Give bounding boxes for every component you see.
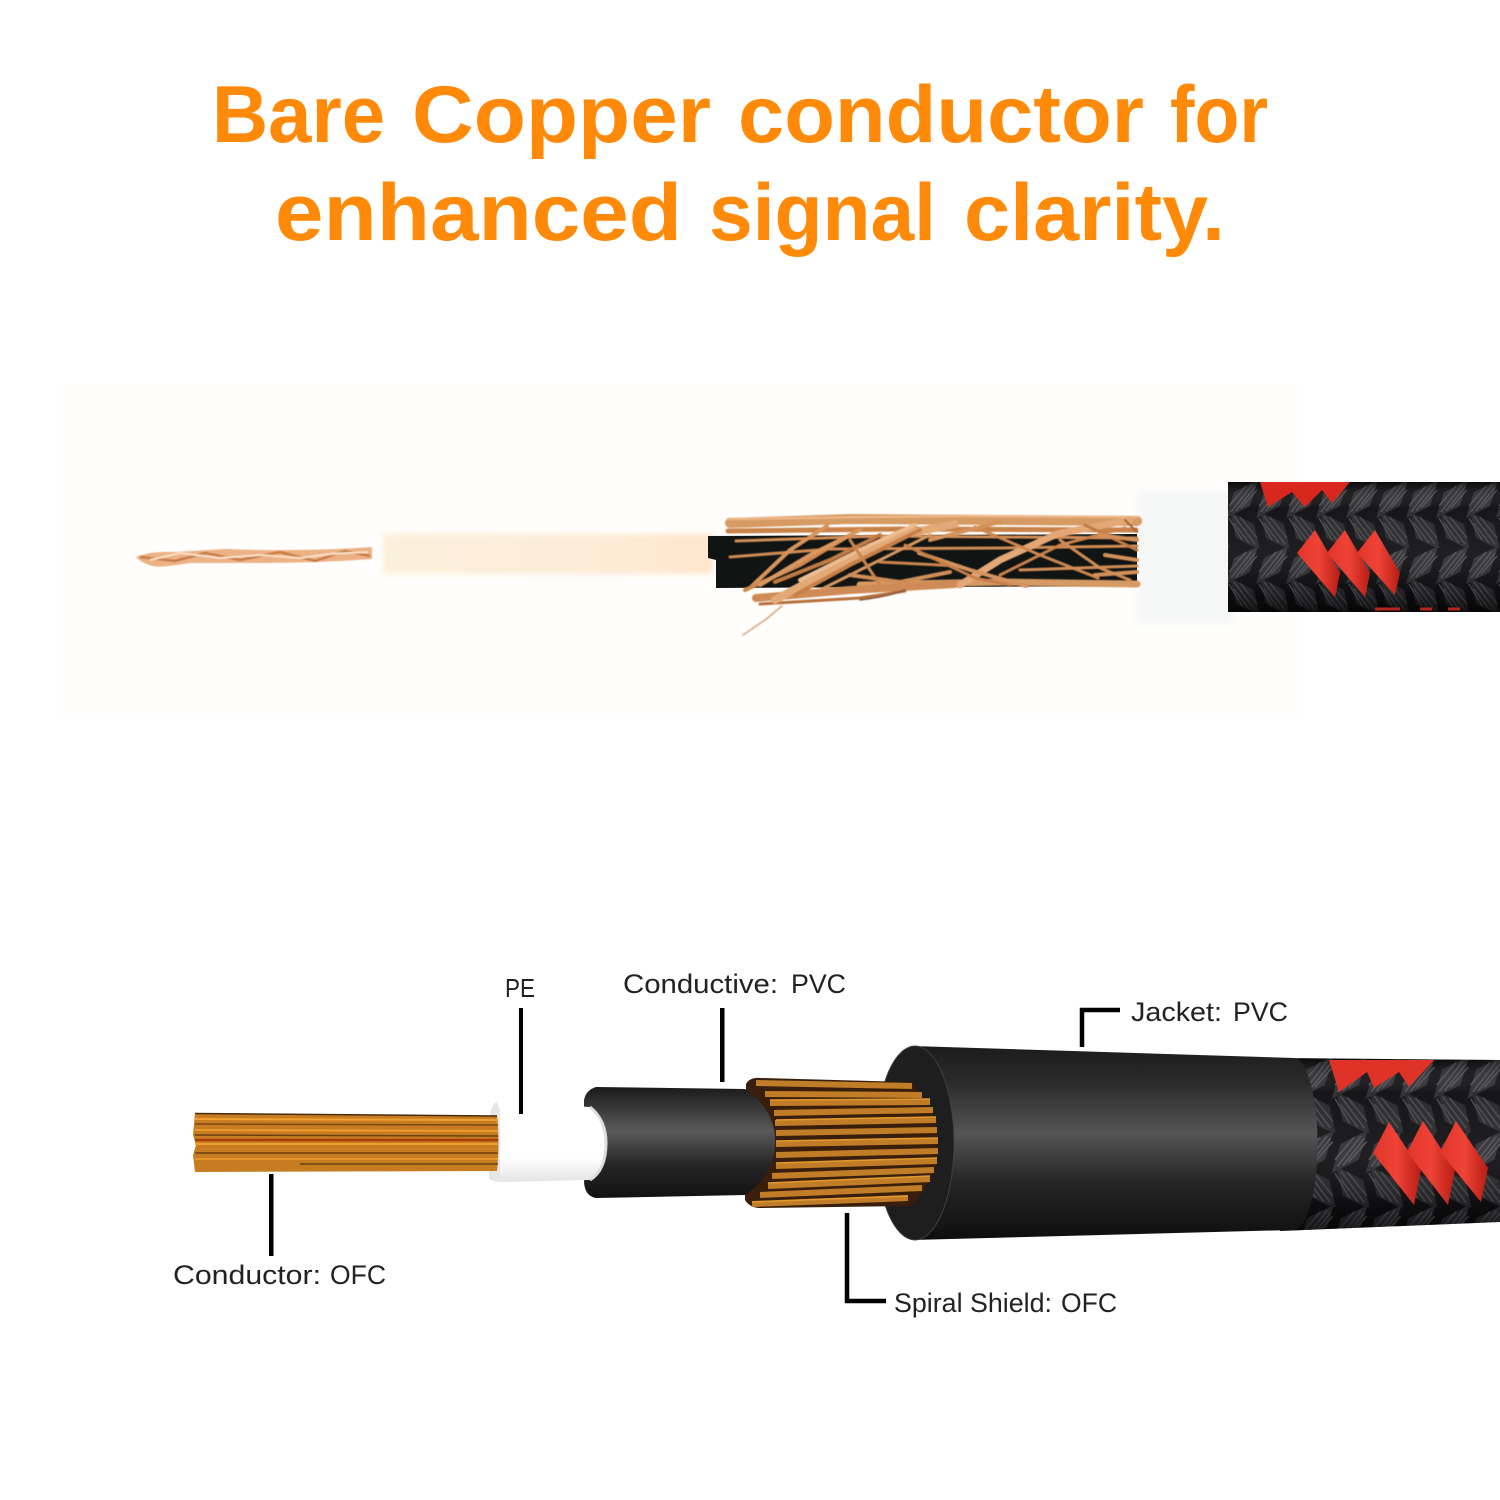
diagram: cable cross-section xyxy=(193,1046,1500,1240)
label: Conductive PVC: PVC xyxy=(791,969,846,999)
label: Conductor OFC: Conductor: xyxy=(173,1260,321,1290)
photo: white outer jacket xyxy=(1137,492,1233,624)
label: Spiral Shield OFC: OFC xyxy=(1061,1288,1117,1318)
diagram: jacket PVC xyxy=(876,1046,1318,1240)
label: Conductor OFC: OFC xyxy=(330,1260,386,1290)
label: Jacket PVC xyxy=(1082,997,1288,1047)
title: enhanced xyxy=(275,168,682,258)
label: Conductor OFC xyxy=(173,1174,386,1290)
title: for xyxy=(1170,70,1268,160)
label: Conductive PVC: Conductive: xyxy=(623,969,778,999)
label: Jacket PVC: Jacket: xyxy=(1131,997,1222,1027)
label: Spiral Shield OFC: Spiral Shield: xyxy=(894,1288,1052,1318)
photo: red weave top xyxy=(1260,482,1350,507)
diagram: red weave middle xyxy=(1373,1121,1488,1205)
photo: black inner layer xyxy=(708,534,1137,588)
title xyxy=(212,70,1268,258)
photo: centre conductor strand xyxy=(136,547,372,567)
label: Jacket PVC: PVC xyxy=(1233,997,1288,1027)
diagram: spiral shield OFC xyxy=(745,1078,938,1208)
photo: red weave middle xyxy=(1297,530,1400,597)
diagram: red weave top xyxy=(1329,1060,1434,1092)
title: conductor xyxy=(738,70,1144,160)
photo: braided sleeve xyxy=(1228,482,1500,612)
diagram: conductive PVC layer xyxy=(584,1087,775,1198)
label: PE xyxy=(505,973,535,1114)
label: PE: PE xyxy=(505,973,535,1003)
photo: copper braid shield xyxy=(728,516,1137,635)
title: Copper xyxy=(412,70,711,160)
label: Conductive PVC xyxy=(623,969,846,1082)
diagram: conductor OFC xyxy=(193,1113,498,1172)
photo: cream insulation xyxy=(383,534,713,574)
label: Spiral Shield OFC xyxy=(847,1213,1117,1318)
title: clarity. xyxy=(964,168,1225,258)
diagram: braided sleeve xyxy=(1280,1058,1500,1231)
photo: stripped cable xyxy=(60,385,1500,715)
title: signal xyxy=(709,168,936,258)
diagram: PE insulation xyxy=(489,1102,606,1182)
title: Bare xyxy=(212,70,385,160)
